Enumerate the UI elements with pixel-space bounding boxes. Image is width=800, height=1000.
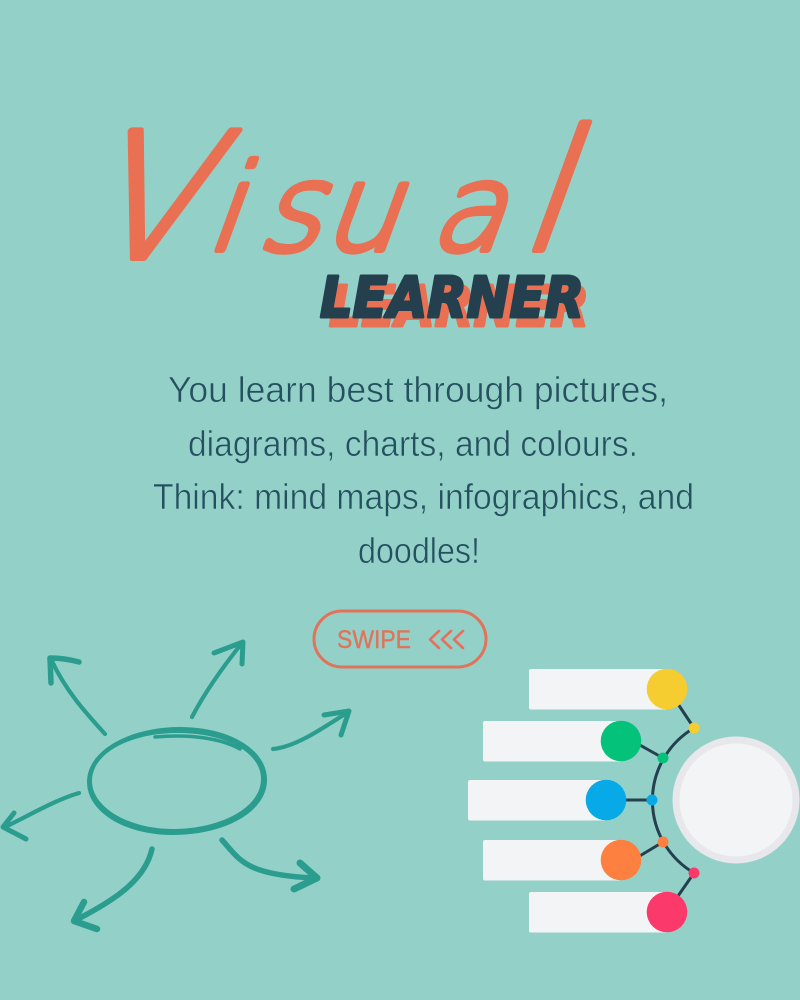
subtitle: LEARNER — [320, 266, 589, 340]
title: Visual: a — [417, 140, 542, 279]
swipe button — [314, 611, 486, 667]
subtitle shadow: LEARNER — [329, 275, 589, 340]
description text: Think: mind maps, infographics, and — [153, 476, 694, 517]
title: Visual: u — [309, 140, 436, 279]
timeline diagram — [468, 669, 800, 932]
description text: diagrams, charts, and colours. — [188, 423, 638, 464]
node: orange — [601, 836, 668, 880]
arrow: right — [273, 711, 349, 749]
description text — [153, 369, 694, 571]
node: green — [601, 721, 668, 764]
arrow: upper left — [50, 658, 105, 734]
button outline — [314, 611, 486, 667]
central hand-drawn ellipse — [87, 727, 267, 835]
arrow: up — [192, 642, 243, 717]
arrow: lower — [74, 849, 152, 929]
node: pink — [647, 868, 700, 932]
node: yellow — [647, 669, 700, 734]
description text: You learn best through pictures, — [168, 369, 668, 410]
arrow: lower left — [3, 793, 79, 839]
title: Visual: V — [64, 95, 258, 300]
title: Visual: l — [502, 94, 619, 290]
central circle — [672, 736, 800, 864]
title: Visual — [64, 94, 619, 300]
description text: doodles! — [358, 530, 480, 571]
six radiating arrows — [3, 642, 349, 929]
title: Visual: i — [193, 140, 278, 279]
title: Visual: s — [245, 140, 359, 279]
icon: triple chevrons — [430, 631, 463, 648]
mind map doodle — [3, 642, 349, 929]
connector lines — [606, 704, 694, 896]
arrow: lower right — [222, 840, 317, 889]
node: blue — [586, 780, 658, 820]
label bars — [468, 669, 667, 932]
subtitle text: LEARNER — [320, 266, 584, 331]
button label: SWIPE — [337, 626, 411, 654]
